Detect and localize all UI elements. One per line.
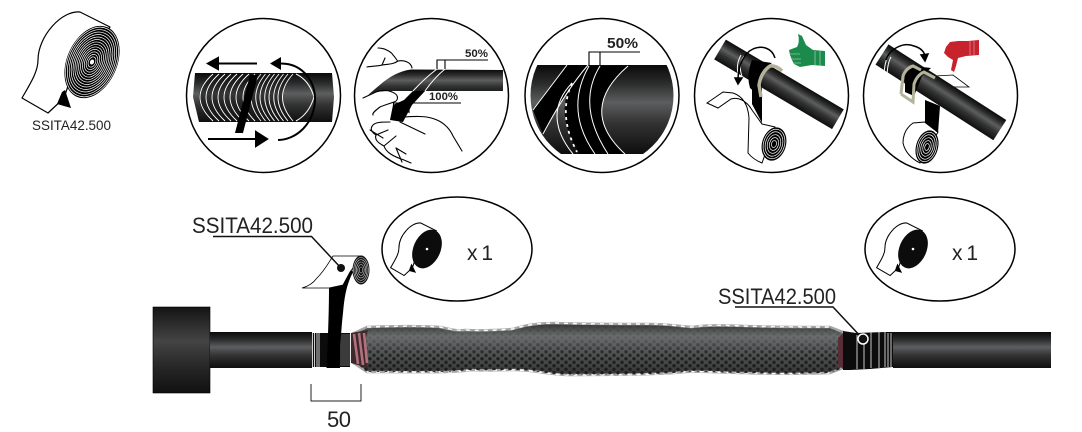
label: x 1: x 1 [467,242,493,265]
tape roll below pipe [707,82,790,164]
arrow: curved around pipe [270,57,315,140]
label: x 1: x 1 [952,242,978,265]
label: 50%: 50% [465,48,488,60]
callout: right SSITA42.500 [718,284,868,344]
icon: small roll [877,223,934,276]
icon: thumbs up [789,34,825,67]
icon: tape roll SSITA42.500 [22,12,130,113]
label: 100%: 100% [429,91,458,103]
callout: left SSITA42.500 [192,213,345,272]
panel: step 2 stretch tape [354,18,508,172]
callout: right SSITA42.500: SSITA42.500 [718,284,836,309]
callout: left SSITA42.500: SSITA42.500 [192,213,313,238]
panel: step 3 overlap 50% [520,18,684,172]
tape wrap [748,60,772,97]
tape [390,69,445,122]
exposed conductor, pink [351,330,368,368]
icon: thumbs down [944,40,979,72]
arrow: wrap direction [735,47,775,84]
tape wrap with clips [905,66,931,96]
icon: small roll [391,223,448,276]
clip [759,66,782,97]
left pipe [210,332,312,368]
wrapped pipe [530,65,674,154]
bracket: 100% [394,103,461,113]
dimension bracket 50 [311,384,361,432]
flange [153,307,210,393]
dimension bracket 50: 50 [327,407,351,432]
tape roll below pipe [903,75,969,166]
panel: step 1 wrap direction [186,18,340,172]
arrow: right [208,132,267,146]
arrow: wrap direction [886,45,928,61]
pipe with coils [193,73,334,122]
tape strip [235,75,258,133]
pipe [876,44,1006,140]
hands [363,48,462,163]
panel: step 5 incorrect wrap direction [864,18,1018,172]
right wrapped tape joint [838,331,893,370]
arrow: left [208,58,257,69]
oval: left quantity [382,197,532,301]
left wrapped tape joint [312,332,350,367]
bracket: 50% [589,52,640,65]
pipe [368,70,503,95]
bracket: 50% [437,60,488,69]
sleeve [352,320,847,380]
right pipe [893,332,1051,368]
oval: right quantity [865,197,1015,301]
pipe [714,40,844,129]
label: 50%: 50% [607,35,638,52]
tape roll applied to left joint [302,256,370,368]
label: roll part number: SSITA42.500 [32,118,111,133]
panel: step 4 correct wrap direction [694,18,848,172]
